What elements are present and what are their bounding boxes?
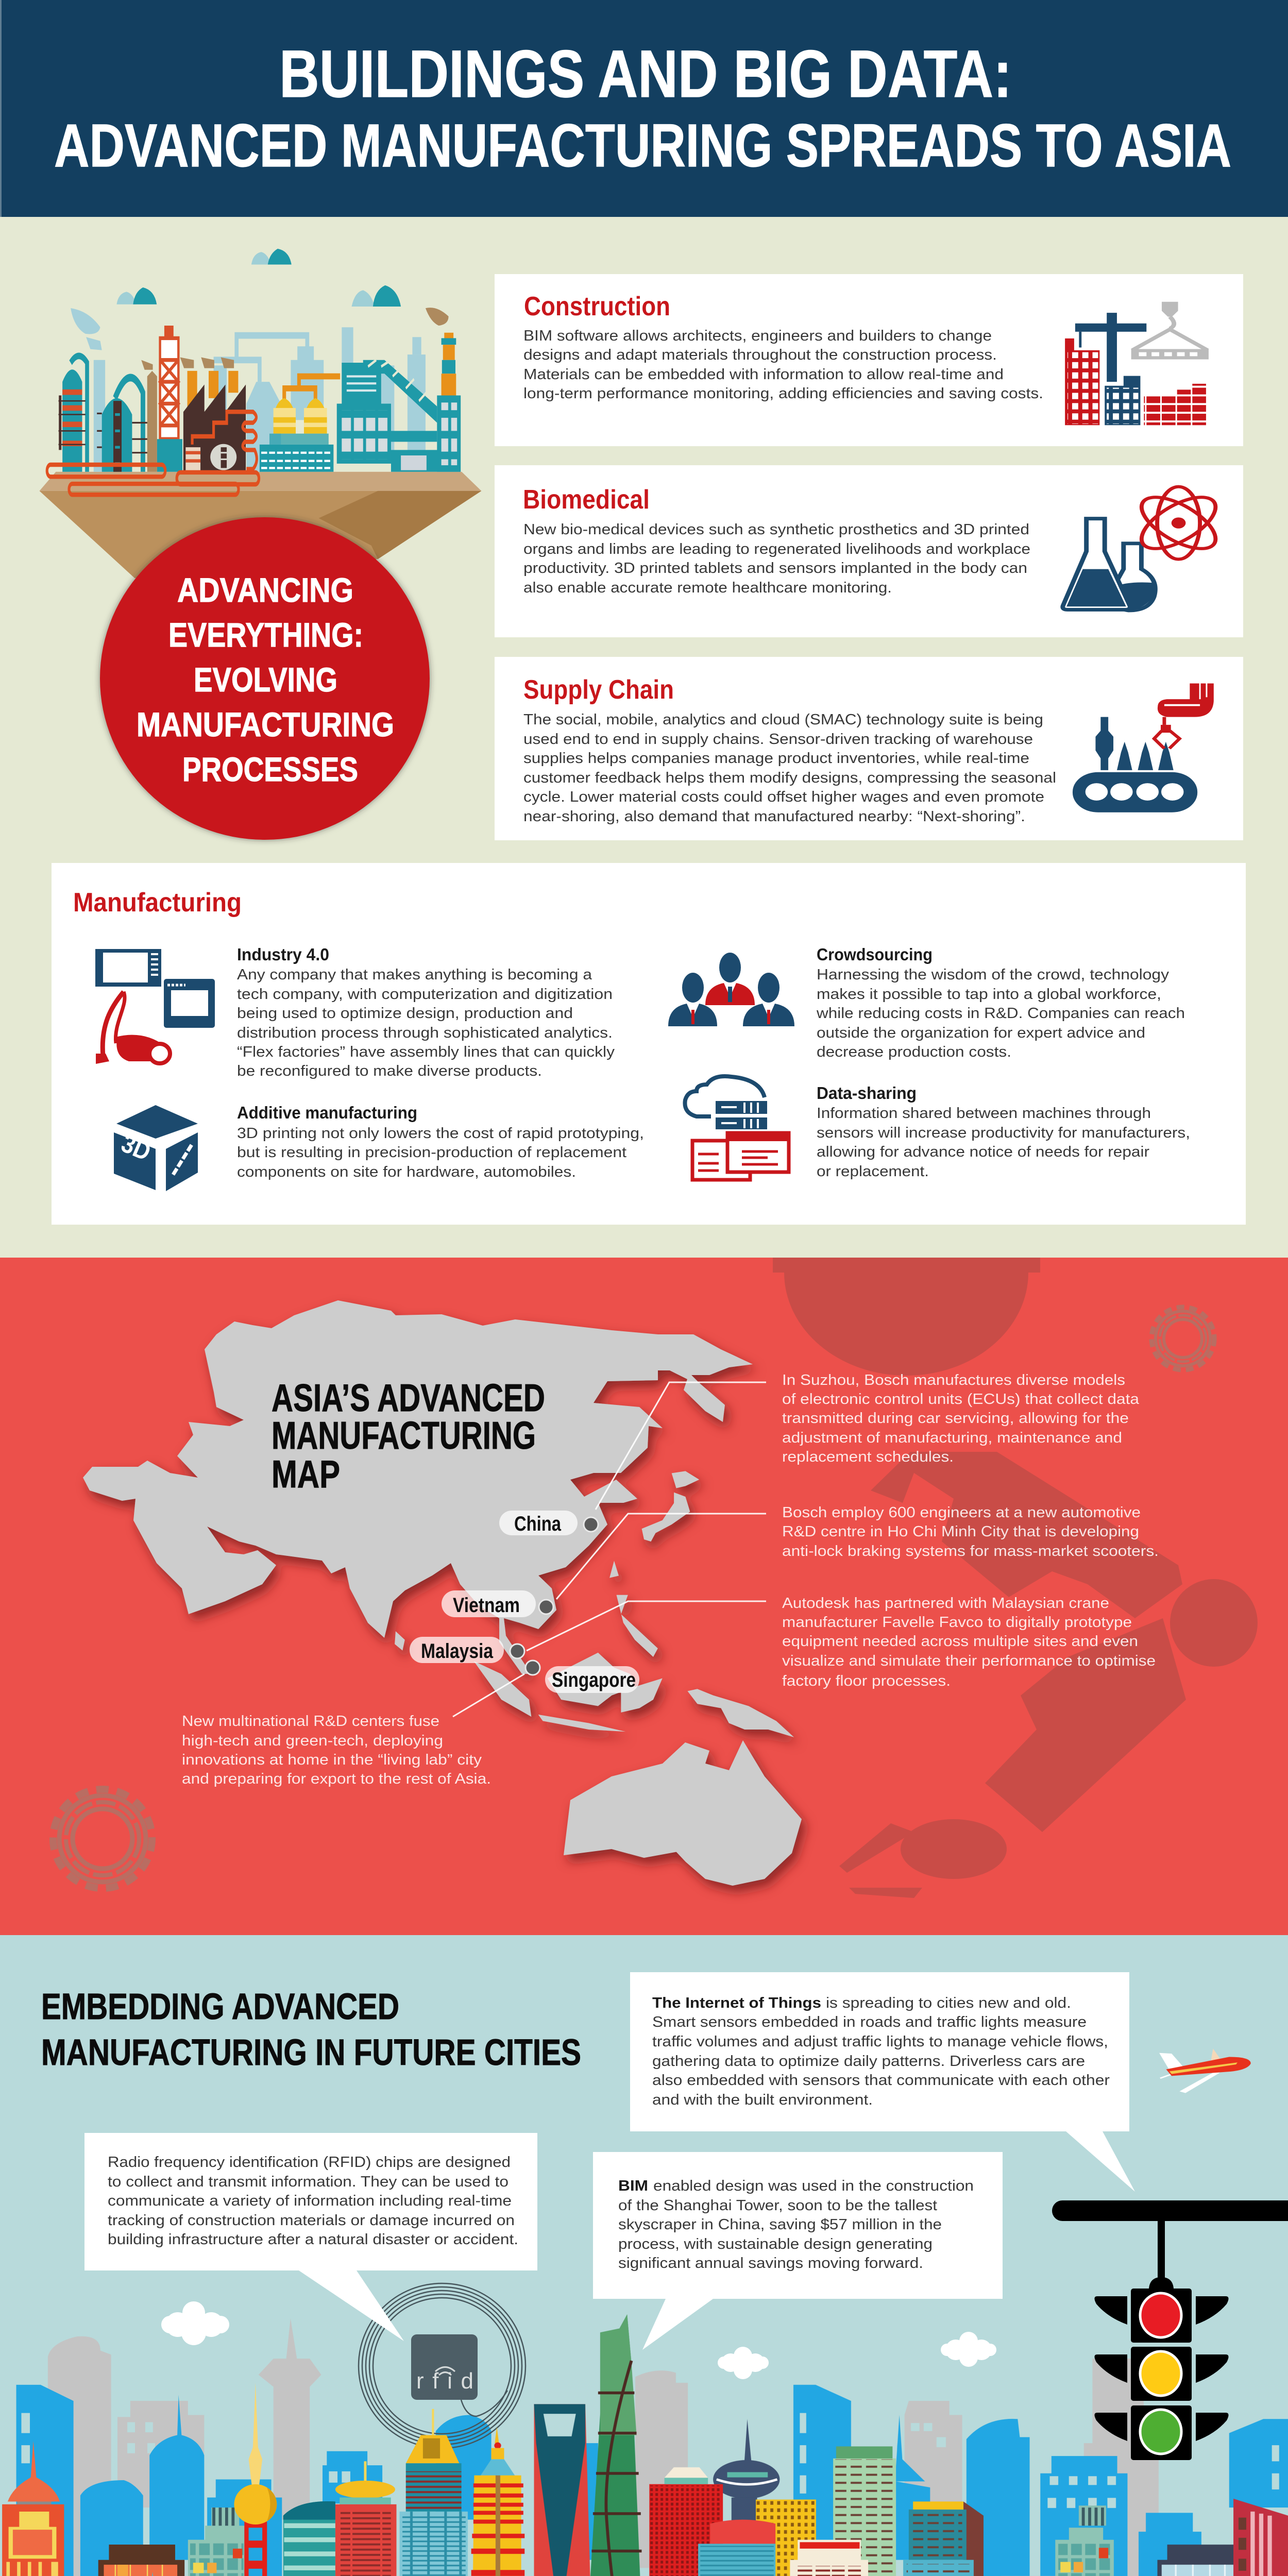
label: Singapore bbox=[526, 1660, 639, 1693]
skyline background right bbox=[635, 2359, 1288, 2576]
block: industry 4.0: tech company, with computerization and digitization bbox=[237, 986, 613, 1003]
Shanghai World Financial Center bbox=[534, 2404, 594, 2576]
text: living lab: high-tech and green-tech, deploying bbox=[182, 1733, 443, 1749]
text: living lab: innovations at home in the “living lab” city bbox=[182, 1752, 482, 1768]
label: Malaysia bbox=[410, 1637, 524, 1663]
callout: internet of things bbox=[630, 1972, 1135, 2192]
red tall building bbox=[650, 2467, 723, 2576]
callout: BIM Shanghai Tower: of the Shanghai Tower, soon to be the tallest bbox=[618, 2197, 937, 2214]
block: additive manufacturing bbox=[237, 1103, 644, 1180]
city heading: MANUFACTURING IN FUTURE CITIES bbox=[41, 2032, 581, 2073]
text: biomedical: New bio-medical devices such as synthetic prosthetics and 3D printed bbox=[523, 521, 1029, 538]
text: construction: long-term performance monitoring, adding efficiencies and saving costs. bbox=[523, 385, 1043, 402]
city heading: EMBEDDING ADVANCED bbox=[41, 1987, 399, 2027]
panel: biomedical bbox=[495, 465, 1243, 637]
islands bbox=[395, 1471, 794, 1737]
text: Suzhou: transmitted during car servicing, allowing for the bbox=[782, 1410, 1129, 1427]
callout: BIM Shanghai Tower: skyscraper in China, saving $57 million in the bbox=[618, 2216, 942, 2233]
text: supply chain: customer feedback helps them modify designs, compressing the seasonal bbox=[523, 770, 1056, 786]
header banner bbox=[0, 0, 1288, 217]
circle: advancing everything: MANUFACTURING bbox=[137, 705, 394, 743]
block: data-sharing: Information shared between machines through bbox=[817, 1105, 1151, 1122]
map title bbox=[272, 1376, 545, 1496]
label: Singapore: Singapore bbox=[552, 1669, 636, 1691]
red lattice tower bbox=[157, 326, 182, 472]
text: Autodesk bbox=[782, 1595, 1156, 1689]
block: industry 4.0: Industry 4.0 bbox=[237, 945, 329, 964]
block: industry 4.0: distribution process through sophisticated analytics. bbox=[237, 1025, 613, 1041]
block: additive manufacturing: components on site for hardware, automobiles. bbox=[237, 1164, 576, 1180]
callout: internet of things: and with the built environment. bbox=[652, 2092, 873, 2108]
text: Ho Chi Minh City: R&D centre in Ho Chi Minh City that is developing bbox=[782, 1523, 1139, 1540]
block: crowdsourcing: Crowdsourcing bbox=[817, 945, 933, 964]
icon: appliances bbox=[95, 949, 215, 1064]
icon: construction bbox=[1065, 302, 1209, 425]
map title: ASIA’S ADVANCED bbox=[272, 1376, 545, 1419]
left towers bbox=[59, 356, 157, 472]
text: Suzhou: adjustment of manufacturing, maintenance and bbox=[782, 1430, 1122, 1446]
cyan building bbox=[131, 2572, 173, 2576]
heading: supply chain: Supply Chain bbox=[523, 675, 674, 705]
block: additive manufacturing: Additive manufacturing bbox=[237, 1103, 417, 1122]
callout: BIM Shanghai Tower bbox=[593, 2152, 1003, 2350]
callout: BIM Shanghai Tower: significant annual savings moving forward. bbox=[618, 2255, 923, 2272]
red tall tower with gold cap bbox=[335, 2461, 396, 2576]
block: additive manufacturing: 3D printing not only lowers the cost of rapid prototyping, bbox=[237, 1125, 644, 1142]
callout: RFID: Radio frequency identification (RFID) chips are designed bbox=[108, 2154, 511, 2171]
text: biomedical: productivity. 3D printed tablets and sensors implanted in the body can bbox=[523, 560, 1027, 577]
block: crowdsourcing: while reducing costs in R&D. Companies can reach bbox=[816, 1005, 1185, 1022]
circle: advancing everything: EVERYTHING: bbox=[168, 616, 363, 654]
text: construction bbox=[523, 328, 1043, 402]
landmass: Eurasia bbox=[83, 1300, 753, 1674]
callout: internet of things: Smart sensors embedded in roads and traffic lights measure bbox=[652, 2014, 1087, 2030]
label: Malaysia: Malaysia bbox=[421, 1640, 494, 1663]
text: Suzhou: of electronic control units (ECUs) that collect data bbox=[782, 1391, 1140, 1408]
title: BUILDINGS AND BIG DATA: bbox=[279, 36, 1012, 111]
block: crowdsourcing: Harnessing the wisdom of the crowd, technology bbox=[817, 967, 1170, 983]
icon: crowd of people bbox=[668, 953, 794, 1026]
callout: internet of things: gathering data to optimize daily patterns. Driverless cars are bbox=[652, 2053, 1085, 2070]
panel: supply chain bbox=[495, 657, 1243, 840]
block: industry 4.0: be reconfigured to make diverse products. bbox=[237, 1063, 542, 1079]
block: industry 4.0 bbox=[237, 945, 615, 1079]
map title: MAP bbox=[272, 1452, 340, 1496]
text: biomedical: also enable accurate remote healthcare monitoring. bbox=[523, 580, 892, 596]
airplane bbox=[1159, 2048, 1251, 2093]
text: Autodesk: equipment needed across multiple sites and even bbox=[782, 1633, 1138, 1650]
icon: 3D box: 3D bbox=[117, 1129, 155, 1166]
callout: internet of things: also embedded with sensors that communicate with each other bbox=[652, 2072, 1110, 2089]
yellow lamp bbox=[1140, 2351, 1181, 2396]
Jin Mao yellow tower bbox=[469, 2427, 527, 2576]
block: crowdsourcing: decrease production costs. bbox=[817, 1044, 1011, 1060]
text: Suzhou bbox=[782, 1372, 1140, 1465]
label: China bbox=[499, 1511, 598, 1535]
text: Ho Chi Minh City bbox=[782, 1504, 1159, 1560]
block: data-sharing: allowing for advance notice of needs for repair bbox=[817, 1144, 1149, 1160]
dark factory with chimneys bbox=[180, 357, 246, 472]
text: Autodesk: manufacturer Favelle Favco to digitally prototype bbox=[782, 1614, 1132, 1631]
text: construction: BIM software allows architects, engineers and builders to change bbox=[523, 328, 992, 344]
city buildings left bbox=[2, 2314, 670, 2576]
icon: cloud data sharing bbox=[685, 1076, 789, 1180]
round teal tower bbox=[283, 2501, 335, 2576]
callout: BIM Shanghai Tower: enabled design was used in the construction bbox=[653, 2178, 974, 2194]
callout: BIM Shanghai Tower: BIM bbox=[618, 2178, 648, 2194]
brown gridded building bbox=[98, 2545, 184, 2576]
callout: BIM Shanghai Tower: process, with sustainable design generating bbox=[618, 2236, 933, 2252]
block: crowdsourcing bbox=[816, 945, 1185, 1060]
pale background plant bbox=[71, 308, 426, 472]
block: industry 4.0: “Flex factories” have assembly lines that can quickly bbox=[237, 1044, 615, 1060]
icon: supply chain bbox=[1073, 684, 1214, 812]
block: data-sharing: Data-sharing bbox=[817, 1083, 917, 1103]
callout: internet of things: The Internet of Things bbox=[652, 1995, 821, 2011]
callout: RFID: tracking of construction materials or damage incurred on bbox=[108, 2212, 515, 2229]
heading: manufacturing: Manufacturing bbox=[73, 888, 242, 918]
yellow tanks bbox=[269, 377, 340, 445]
background robot arm bbox=[773, 1258, 1258, 1898]
heading: biomedical: Biomedical bbox=[523, 485, 650, 515]
icon: 3D box bbox=[114, 1105, 198, 1191]
circle: advancing everything: EVOLVING bbox=[194, 660, 337, 699]
block: additive manufacturing: but is resulting in precision-production of replacement bbox=[237, 1144, 626, 1161]
text: construction: Materials can be embedded with information to allow real-time and bbox=[523, 366, 1004, 383]
callout: internet of things: traffic volumes and adjust traffic lights to manage vehicle flows, bbox=[652, 2033, 1108, 2050]
callout: RFID bbox=[84, 2133, 537, 2341]
text: Autodesk: Autodesk has partnered with Malaysian crane bbox=[782, 1595, 1109, 1612]
yellow grid building bbox=[756, 2500, 816, 2576]
pearl tower bbox=[233, 2383, 278, 2576]
text: living lab: and preparing for export to the rest of Asia. bbox=[182, 1771, 491, 1787]
cream tower bbox=[790, 2540, 868, 2576]
landmass: Australia bbox=[564, 1740, 802, 1886]
block: data-sharing: or replacement. bbox=[817, 1163, 929, 1180]
label: Vietnam bbox=[442, 1590, 553, 1617]
map of Asia bbox=[83, 1300, 802, 1886]
orange tower bbox=[2, 2441, 64, 2576]
clouds bbox=[116, 249, 401, 307]
text: living lab bbox=[182, 1713, 491, 1787]
grid building bbox=[188, 2507, 244, 2576]
circle: advancing everything bbox=[100, 517, 430, 840]
label: Vietnam: Vietnam bbox=[453, 1594, 520, 1617]
text: biomedical bbox=[523, 521, 1030, 596]
orange coiled pipes bbox=[47, 412, 259, 495]
callout: RFID: to collect and transmit information. They can be used to bbox=[108, 2174, 509, 2190]
block: crowdsourcing: outside the organization for expert advice and bbox=[817, 1025, 1145, 1041]
text: Autodesk: visualize and simulate their performance to optimise bbox=[782, 1653, 1156, 1669]
gear right bbox=[1151, 1307, 1214, 1370]
circle: advancing everything: PROCESSES bbox=[182, 750, 358, 788]
block: crowdsourcing: makes it possible to tap into a global workforce, bbox=[817, 986, 1161, 1003]
pale green tall building bbox=[833, 2446, 896, 2576]
block: data-sharing bbox=[817, 1083, 1190, 1180]
illustration: factory on funnel bbox=[40, 249, 481, 578]
clouds white bbox=[161, 2301, 996, 2379]
text: supply chain bbox=[523, 711, 1056, 825]
text: Ho Chi Minh City: Bosch employ 600 engineers at a new automotive bbox=[782, 1504, 1141, 1521]
title bbox=[54, 36, 1231, 180]
RFID chip with antenna coils bbox=[359, 2283, 526, 2448]
circle: advancing everything: ADVANCING bbox=[177, 571, 353, 609]
city heading bbox=[41, 1987, 581, 2073]
crimson building bbox=[1233, 2499, 1288, 2576]
teal grid building bbox=[1055, 2505, 1114, 2576]
text: supply chain: The social, mobile, analytics and cloud (SMAC) technology suite is being bbox=[523, 711, 1043, 728]
red and cyan tower bbox=[697, 2520, 776, 2576]
green lamp bbox=[1140, 2410, 1181, 2454]
heading: construction: Construction bbox=[524, 292, 670, 321]
text: supply chain: supplies helps companies manage product inventories, while real-time bbox=[523, 750, 1029, 767]
panel: construction bbox=[495, 274, 1243, 446]
glass building bbox=[1157, 2545, 1235, 2576]
traffic light bbox=[1052, 2200, 1288, 2460]
map title: MANUFACTURING bbox=[272, 1414, 536, 1457]
connector lines bbox=[453, 1382, 766, 1717]
teal plant buildings bbox=[260, 308, 461, 472]
text: supply chain: near-shoring, also demand that manufactured nearby: “Next-shoring”. bbox=[523, 808, 1025, 825]
text: Ho Chi Minh City: anti-lock braking systems for mass-market scooters. bbox=[782, 1543, 1159, 1560]
Shanghai Tower bbox=[587, 2314, 642, 2576]
block: data-sharing: sensors will increase productivity for manufacturers, bbox=[817, 1125, 1190, 1141]
icon: biomedical bbox=[1063, 487, 1227, 611]
text: Suzhou: replacement schedules. bbox=[782, 1449, 954, 1465]
text: construction: designs and adapt materials throughout the construction process. bbox=[523, 347, 997, 363]
gear left bbox=[53, 1789, 152, 1888]
city buildings right bbox=[650, 2419, 1288, 2576]
text: supply chain: used end to end in supply chains. Sensor-driven tracking of warehouse bbox=[523, 731, 1033, 748]
teal skyscraper with crown bbox=[399, 2409, 468, 2576]
block: industry 4.0: being used to optimize design, production and bbox=[237, 1005, 573, 1022]
platform funnel bbox=[40, 472, 481, 578]
text: supply chain: cycle. Lower material costs could offset higher wages and even promote bbox=[523, 789, 1044, 805]
panel: manufacturing bbox=[52, 863, 1246, 1225]
text: Autodesk: factory floor processes. bbox=[782, 1673, 951, 1689]
skyline background left bbox=[16, 2318, 598, 2576]
label: China: China bbox=[514, 1513, 562, 1535]
block: industry 4.0: Any company that makes anything is becoming a bbox=[237, 967, 592, 983]
callout: internet of things: is spreading to cities new and old. bbox=[826, 1995, 1071, 2011]
RFID chip with antenna coils: rfid bbox=[416, 2368, 473, 2394]
text: biomedical: organs and limbs are leading to regenerated livelihoods and workplace bbox=[523, 541, 1030, 557]
red strip at edge bbox=[649, 2484, 670, 2576]
red lamp bbox=[1140, 2293, 1181, 2337]
callout: RFID: building infrastructure after a natural disaster or accident. bbox=[108, 2231, 518, 2248]
teal stepped tower bbox=[903, 2501, 984, 2576]
callout: RFID: communicate a variety of information including real-time bbox=[108, 2193, 512, 2209]
text: living lab: New multinational R&D centers fuse bbox=[182, 1713, 439, 1730]
text: Suzhou: In Suzhou, Bosch manufactures diverse models bbox=[782, 1372, 1125, 1388]
teal UFO tower bbox=[713, 2419, 779, 2523]
